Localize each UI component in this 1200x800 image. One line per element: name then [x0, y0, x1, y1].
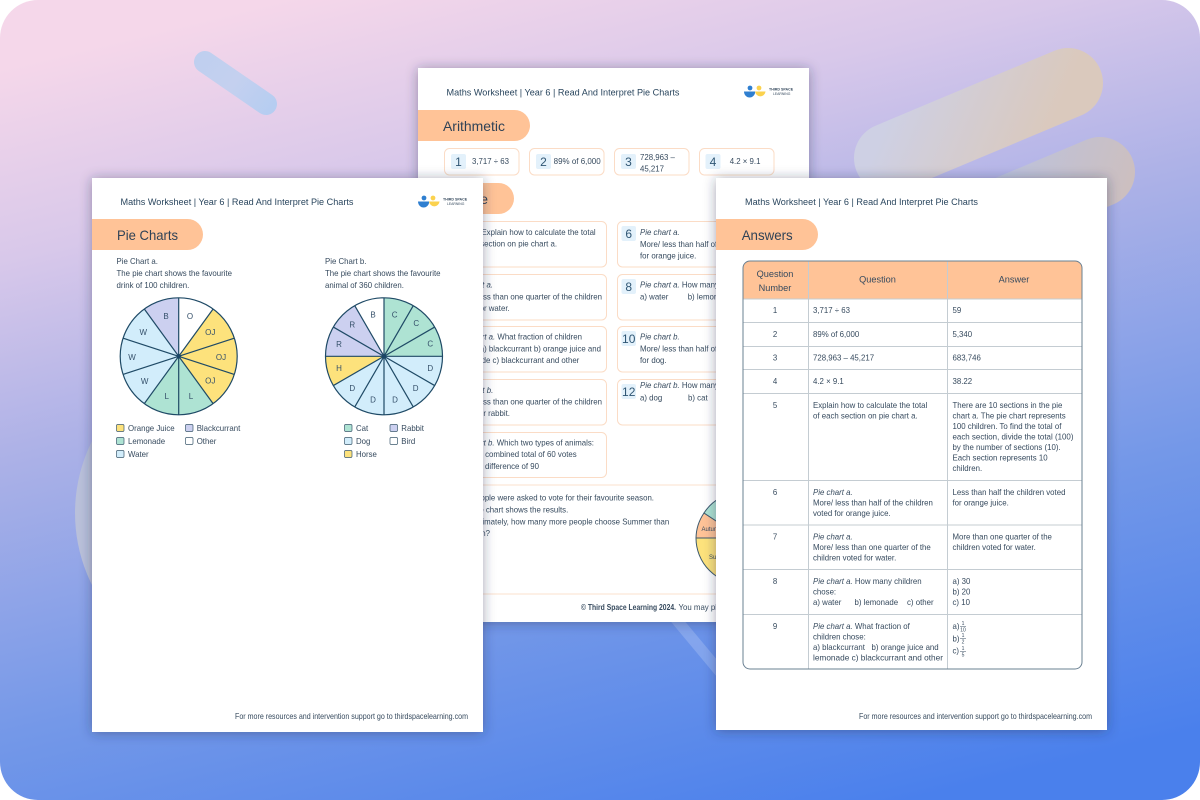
- question 5: Explain how to calculate the total: [481, 228, 596, 237]
- row 6: for orange juice.: [952, 498, 1009, 508]
- heading: Answers: [716, 219, 818, 250]
- row 6: 6: [773, 488, 778, 497]
- decorative diagonal streak: [670, 612, 725, 678]
- question 12: Pie chart b. How many people chose:: [640, 381, 770, 390]
- question 10: for dog.: [640, 356, 667, 365]
- question 4: 4.2 × 9.1: [730, 157, 760, 166]
- row 9: c): [952, 646, 959, 656]
- pie chart a: W: [128, 353, 136, 362]
- question 1: 1: [455, 155, 462, 169]
- pie chart b description: [325, 257, 441, 290]
- legend: pie chart b: Cat: [356, 424, 369, 433]
- row 9: children chose:: [813, 632, 866, 642]
- legend: pie chart b: [344, 424, 425, 459]
- pie chart b: D: [413, 384, 419, 393]
- row 5: chart a. The pie chart represents: [952, 412, 1066, 420]
- pie chart a: L: [189, 392, 194, 401]
- pie chart: favourite season: Summer: [709, 555, 732, 561]
- row 9: 1: [962, 621, 965, 627]
- row 5: each section, divide the total (100): [952, 432, 1074, 442]
- copyright footer: You may photocopy this page.: [678, 603, 783, 612]
- question 12: 12: [622, 385, 636, 399]
- pie chart b: D: [349, 384, 355, 393]
- question 12: b) cat: [688, 393, 708, 402]
- question 7: Pie chart a.: [453, 281, 493, 290]
- question 5: [444, 222, 606, 267]
- pie chart b description: The pie chart shows the favourite: [325, 269, 441, 278]
- heading: Pie Charts: Pie Charts: [117, 227, 178, 243]
- row 5: 100 children. To find the total of: [952, 422, 1062, 431]
- row 9: 1: [962, 646, 965, 652]
- logo: THIRD SPACE: [769, 88, 794, 92]
- pie chart b description: Pie Chart b.: [325, 257, 366, 266]
- row 9: a): [952, 622, 960, 631]
- row 7: More/ less than one quarter of the: [813, 543, 931, 552]
- table header row: Question: [757, 269, 793, 279]
- row 1: [773, 306, 961, 315]
- legend: pie chart b: Rabbit: [401, 424, 425, 433]
- question 6: Pie chart a.: [640, 228, 680, 237]
- logo: THIRD SPACE: [443, 198, 468, 202]
- page header: Maths Worksheet | Year 6 | Read And Interpret Pie Charts: [745, 197, 978, 208]
- question 6: [618, 222, 781, 267]
- row 9: 1: [962, 633, 965, 639]
- row 9: 9: [773, 622, 777, 631]
- pie chart: favourite season: Autumn: [702, 527, 722, 533]
- pie chart b: H: [336, 364, 342, 373]
- legend: pie chart b: Dog: [356, 437, 370, 446]
- row 7: [773, 532, 1053, 562]
- question 6: for orange juice.: [640, 252, 696, 260]
- logo: LEARNING: [447, 202, 465, 206]
- question 9: a) blackcurrant b) orange juice and: [480, 344, 601, 353]
- pie chart b: C: [392, 310, 398, 320]
- row 7: children voted for water.: [813, 554, 896, 562]
- question 3: 3: [625, 155, 632, 169]
- question 11: More/ less than one quarter of the children: [455, 398, 602, 407]
- page header: Maths Worksheet | Year 6 | Read And Interpret Pie Charts: [446, 88, 680, 98]
- pie chart b: D: [392, 396, 398, 404]
- question 7: More/ less than one quarter of the children: [455, 293, 602, 302]
- row 9: a) blackcurrant: [813, 643, 866, 652]
- row 3: 683,746: [952, 354, 981, 362]
- row 5: Each section represents 10: [952, 454, 1048, 462]
- footer note: For more resources and intervention support go to thirdspacelearning.com: [859, 712, 1092, 721]
- row 5: of each section on pie chart a.: [813, 412, 918, 420]
- row 1: 1: [773, 306, 777, 315]
- row 8: Pie chart a. How many children: [813, 577, 922, 586]
- pie chart a: [120, 298, 237, 415]
- pie chart a description: Pie Chart a.: [116, 257, 158, 266]
- row 7: 7: [773, 532, 777, 542]
- question 13: Pie chart b. Which two types of animals:: [455, 438, 594, 447]
- question 6: More/ less than half of the children voted: [640, 240, 781, 249]
- row 9: 2: [962, 640, 965, 646]
- decorative large pill: [889, 83, 1068, 158]
- row 5: There are 10 sections in the pie: [952, 401, 1063, 410]
- heading: second section: Practice: [437, 191, 488, 207]
- row 8: b) 20: [952, 588, 971, 596]
- row 5: Explain how to calculate the total: [813, 401, 927, 410]
- question 8: Pie chart a. How many children chose:: [640, 281, 774, 290]
- question 4: 4: [710, 155, 717, 169]
- table header row: Answer: [999, 274, 1029, 284]
- row 9: lemonade c) blackcurrant and other: [813, 654, 943, 662]
- pie chart b: C: [413, 319, 419, 328]
- pie chart a description: drink of 100 children.: [116, 281, 189, 290]
- row 6: [773, 488, 1065, 518]
- pie chart a: OJ: [205, 376, 215, 386]
- row 7: More than one quarter of the: [952, 532, 1053, 542]
- row 3: [773, 354, 981, 362]
- pie chart b: D: [427, 364, 433, 373]
- question 11: voted for rabbit.: [455, 409, 510, 418]
- pie chart b: R: [349, 320, 355, 330]
- answers table: [743, 261, 1082, 669]
- page header: Maths Worksheet | Year 6 | Read And Interpret Pie Charts: [120, 197, 354, 208]
- row 4: 4: [773, 377, 778, 386]
- row 1: 3,717 ÷ 63: [813, 306, 851, 315]
- question 13: a) have a combined total of 60 votes: [450, 450, 577, 459]
- copyright footer: © Third Space Learning 2024.: [581, 603, 676, 612]
- heading: second section: [418, 183, 514, 214]
- row 9: b) orange juice and: [872, 643, 939, 652]
- pie chart a: B: [163, 312, 169, 321]
- logo: [744, 86, 794, 98]
- row 9: b): [952, 634, 960, 644]
- pie chart a description: The pie chart shows the favourite: [116, 269, 233, 278]
- row 7: children voted for water.: [952, 543, 1036, 552]
- row 9: Pie chart a. What fraction of: [813, 622, 911, 631]
- legend: pie chart a: Other: [197, 437, 217, 446]
- question 6: 6: [625, 227, 632, 241]
- row 6: Less than half the children voted: [952, 488, 1065, 497]
- row 7: Pie chart a.: [813, 532, 853, 542]
- row 5: 5: [773, 401, 778, 410]
- question 14 text: Approximately, how many more people choose Summer than: [458, 518, 669, 526]
- row 4: [773, 377, 972, 386]
- logo: [418, 196, 468, 208]
- decorative circle: [75, 352, 397, 674]
- row 8: a) water: [813, 598, 842, 607]
- legend: pie chart a: [116, 424, 241, 459]
- pie chart a: OJ: [216, 353, 226, 362]
- row 4: 38.22: [952, 377, 972, 386]
- worksheet page: pie charts: [92, 178, 483, 732]
- row 5: [773, 401, 1074, 473]
- legend: pie chart b: Horse: [356, 450, 378, 459]
- row 9: 5: [962, 652, 965, 658]
- question 10: More/ less than half of the children voted: [640, 344, 781, 354]
- worksheet page: answers: [716, 178, 1107, 730]
- row 8: a) 30: [952, 577, 971, 586]
- question 9: Pie chart a. What fraction of children: [456, 332, 582, 341]
- question 2: 89% of 6,000: [554, 157, 601, 166]
- question 8: a) water: [640, 293, 669, 302]
- legend: pie chart a: Orange Juice: [128, 424, 175, 433]
- row 5: children.: [952, 464, 982, 473]
- worksheet page: arithmetic and problems: [418, 68, 809, 622]
- row 8: c) 10: [952, 598, 971, 607]
- row 2: 89% of 6,000: [813, 330, 860, 339]
- row 8: b) lemonade: [854, 598, 899, 607]
- row 2: 2: [773, 330, 777, 339]
- row 9: [773, 621, 966, 662]
- row 4: 4.2 × 9.1: [813, 377, 844, 386]
- heading: Answers: Answers: [742, 227, 793, 243]
- question 10: Pie chart b.: [640, 332, 680, 341]
- question 11: [444, 380, 606, 425]
- question 8: b) lemonade: [688, 293, 732, 302]
- footer note: For more resources and intervention support go to thirdspacelearning.com: [235, 712, 468, 721]
- copyright footer: [581, 603, 783, 612]
- row 3: 3: [773, 354, 778, 362]
- legend: pie chart b: Bird: [401, 437, 415, 446]
- question 1: [444, 148, 519, 175]
- row 8: [773, 577, 971, 607]
- question 14 text: The pie chart shows the results.: [458, 506, 568, 514]
- heading: Pie Charts: [92, 219, 203, 250]
- row 8: chose:: [813, 588, 836, 596]
- pie chart a: L: [164, 392, 169, 401]
- legend: pie chart a: Lemonade: [128, 437, 166, 446]
- question 10: [618, 326, 781, 372]
- table header row: [743, 261, 1082, 299]
- question 9: [444, 326, 606, 372]
- question 3: 45,217: [640, 164, 664, 174]
- row 2: [773, 330, 973, 339]
- question 7: [444, 274, 606, 320]
- row 9: 10: [960, 628, 966, 634]
- pie chart a: W: [141, 377, 149, 386]
- row 8: 8: [773, 577, 778, 586]
- pie chart b: D: [370, 396, 376, 404]
- pie chart b: C: [427, 340, 433, 348]
- row 2: 5,340: [952, 330, 973, 339]
- question 2: [530, 148, 604, 175]
- legend: pie chart a: Water: [128, 450, 149, 459]
- table header row: Question: [859, 274, 896, 284]
- pie chart a description: [116, 257, 233, 290]
- heading: Arithmetic: Arithmetic: [443, 118, 505, 134]
- question 11: Pie chart b.: [454, 386, 493, 395]
- pie chart b description: animal of 360 children.: [325, 281, 404, 290]
- row 8: c) other: [907, 598, 934, 607]
- question 2: 2: [540, 155, 547, 169]
- question 8: 8: [625, 280, 632, 294]
- question 10: 10: [622, 332, 636, 346]
- row 6: Pie chart a.: [813, 488, 853, 497]
- question 5: of each section on pie chart a.: [452, 240, 557, 249]
- question 12: a) dog: [640, 393, 662, 402]
- logo: LEARNING: [773, 92, 791, 96]
- pie chart b: [326, 298, 442, 415]
- pie chart a: OJ: [205, 328, 215, 337]
- heading: Arithmetic: [418, 110, 530, 141]
- question 3: [614, 148, 689, 175]
- row 6: More/ less than half of the children: [813, 498, 933, 508]
- question 1: 3,717 ÷ 63: [472, 157, 510, 166]
- question 7: voted for water.: [456, 304, 510, 313]
- row 5: by the number of sections (10).: [952, 443, 1061, 452]
- pie chart a: O: [187, 312, 193, 321]
- legend: pie chart a: Blackcurrant: [197, 424, 241, 433]
- pie chart b: B: [370, 310, 376, 320]
- question 12: [618, 380, 780, 425]
- question 9: lemonade c) blackcurrant and other: [456, 356, 580, 365]
- question 13: [444, 432, 606, 478]
- row 6: voted for orange juice.: [813, 509, 891, 518]
- table header row: Number: [759, 283, 791, 293]
- question 13: b) have a difference of 90: [450, 462, 540, 471]
- row 3: 728,963 – 45,217: [813, 354, 874, 362]
- pie chart b: R: [336, 340, 342, 349]
- question 3: 728,963 –: [640, 153, 676, 162]
- question 8: [618, 274, 780, 320]
- decorative blue pill: [205, 62, 266, 104]
- question 14 text: Autumn?: [459, 529, 491, 538]
- question 4: [700, 148, 774, 175]
- pie chart a: W: [140, 328, 148, 337]
- decorative lower pill: [900, 172, 1100, 256]
- row 1: 59: [952, 306, 961, 315]
- question 14 text: People were asked to vote for their favourite season.: [471, 494, 654, 502]
- question 14 text: [458, 494, 669, 538]
- pie chart: favourite season: [696, 492, 788, 584]
